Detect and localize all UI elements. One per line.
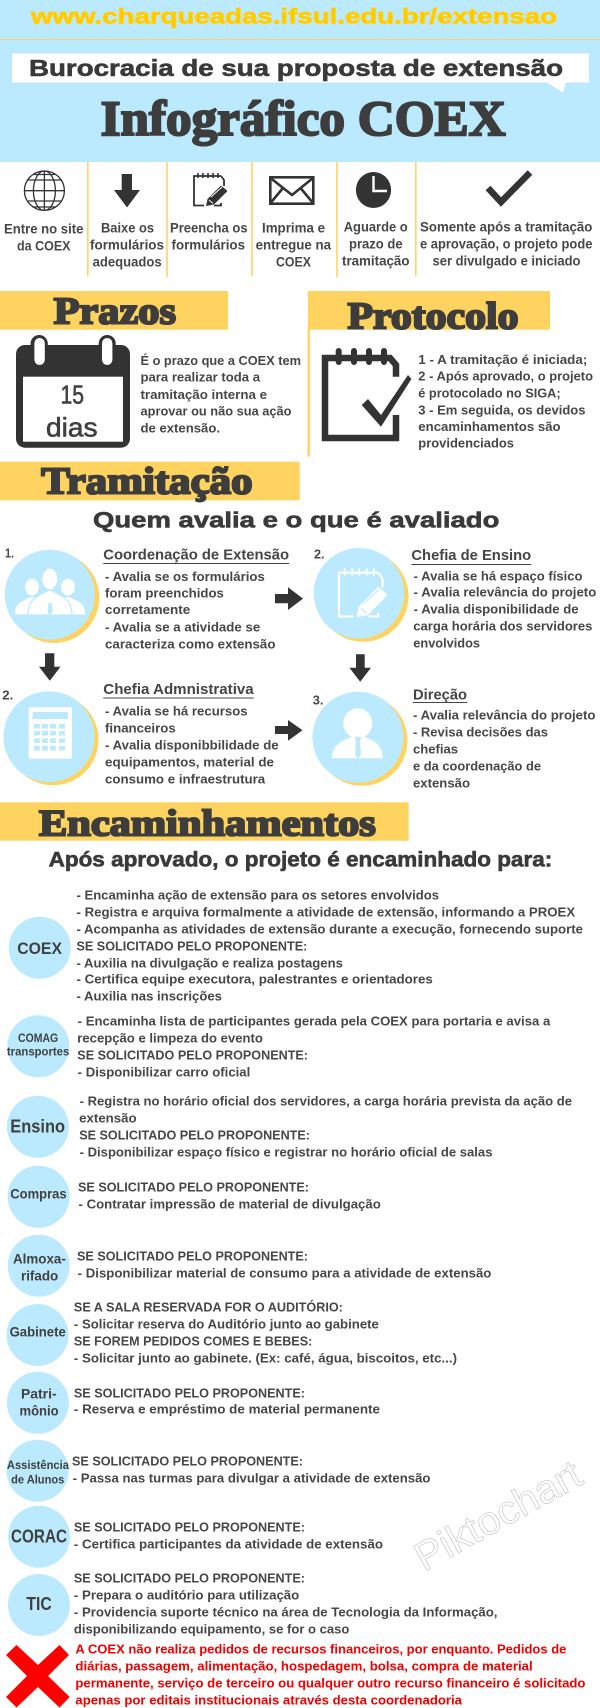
icon: envelope <box>270 177 313 204</box>
text: COEX duties: - Registra e arquiva formalmente a atividade de extensão, informando a PROEX <box>76 904 576 919</box>
icon: checklist <box>325 351 411 438</box>
text: Gabinete duties: - Solicitar reserva do Auditório junto ao gabinete <box>74 1317 379 1332</box>
step: imprima e entregue: Imprima e <box>262 220 325 236</box>
icon: notepad and pencil <box>194 173 228 206</box>
text: Patrimônio duties: SE SOLICITADO PELO PROPONENTE: <box>74 1385 305 1400</box>
badge: COMAG transportes <box>7 1015 70 1077</box>
row: Ensino <box>7 1094 572 1160</box>
text: protocolo steps: 3 - Em seguida, os devidos <box>418 402 586 417</box>
step: aguarde o prazo <box>342 219 410 269</box>
text: administrativa criteria: consumo e infraestrutura <box>105 772 266 787</box>
panel: prazos <box>0 290 301 448</box>
text: ensino criteria: - Avalia relevância do projeto <box>414 585 596 600</box>
text: Ensino duties: - Registra no horário oficial dos servidores, a carga horária prevista da ação de <box>80 1094 572 1109</box>
text: warning: apenas por editais institucionais através desta coordenadoria <box>75 1693 463 1708</box>
text: coordenação title: Coordenação de Extensão <box>103 546 289 563</box>
badge: Patrimônio: mônio <box>20 1403 59 1419</box>
icon: notepad circle <box>314 548 408 642</box>
text: prazo description: aprovar ou não sua ação <box>140 404 292 419</box>
text: warning: diárias, passagem, alimentação, hospedagem, bolsa, compra de material <box>75 1659 533 1674</box>
text: administrativa criteria: equipamentos, material de <box>105 755 274 770</box>
step: preencha os formulários: formulários <box>172 237 245 253</box>
text: COEX duties: - Auxilia nas inscrições <box>76 988 222 1003</box>
heading: prazos: Prazos <box>54 290 176 332</box>
row: CORAC <box>8 1506 383 1568</box>
badge: COEX <box>9 917 71 979</box>
text: protocolo steps: encaminhamentos são <box>418 419 561 434</box>
badge: Assistência de Alunos: Assistência <box>7 1458 69 1472</box>
text: protocolo steps <box>418 352 593 451</box>
text: Gabinete duties <box>74 1300 457 1366</box>
badge: Ensino <box>7 1096 69 1158</box>
badge: TIC <box>8 1574 70 1636</box>
row: Patrimônio <box>7 1372 380 1434</box>
watermark: Piktochart: Piktochart <box>407 1452 589 1580</box>
text: protocolo steps: é protocolado no SIGA; <box>418 386 561 401</box>
text: coordenação criteria <box>105 569 276 651</box>
badge: TIC: TIC <box>26 1594 52 1614</box>
text: ensino title: Chefia de Ensino <box>411 547 531 564</box>
text: COEX duties: SE SOLICITADO PELO PROPONENTE: <box>76 938 307 953</box>
icon: people circle <box>5 550 99 643</box>
text: ensino criteria: - Avalia se há espaço físico <box>414 568 583 583</box>
text: ensino criteria: carga horária dos servidores <box>413 618 592 633</box>
panel: direção <box>312 686 596 790</box>
text: CORAC duties <box>74 1520 383 1552</box>
text: prazo description: de extensão. <box>140 421 220 436</box>
text: Ensino duties: extensão <box>79 1111 137 1126</box>
text: coordenação criteria: - Avalia se os formulários <box>105 569 265 584</box>
heading: encaminhamentos <box>0 802 409 845</box>
step: somente após: ser divulgado e iniciado <box>432 253 580 269</box>
text: direção title: Direção <box>413 686 467 703</box>
text: coordenação criteria: foram preenchidos <box>105 585 224 600</box>
text: Compras duties <box>78 1180 381 1212</box>
text: direção criteria: - Revisa decisões das <box>413 724 548 739</box>
text: warning: A COEX não realiza pedidos de recursos financeiros, por enquanto. Pedidos de <box>75 1642 566 1657</box>
badge: Gabinete <box>6 1304 68 1366</box>
badge: CORAC <box>8 1506 70 1568</box>
text: prazo description <box>140 353 301 436</box>
badge: Assistência de Alunos <box>7 1440 69 1502</box>
heading: prazos <box>0 290 228 332</box>
text: Assistência duties: SE SOLICITADO PELO PROPONENTE: <box>72 1454 303 1469</box>
text: ensino criteria: - Avalia disponibilidade de <box>414 601 579 616</box>
text: Patrimônio duties <box>74 1385 380 1416</box>
panel: chefia administrativa: 2. <box>2 687 13 702</box>
step: baixe os formulários <box>90 220 164 270</box>
arrow: to chefia de ensino <box>275 587 303 610</box>
text: Almoxarifado duties: SE SOLICITADO PELO PROPONENTE: <box>77 1249 308 1264</box>
step: preencha os formulários: Preencha os <box>170 220 248 236</box>
step: somente após: Somente após a tramitação <box>420 219 592 235</box>
text: COMAG duties: recepção e limpeza do evento <box>77 1031 263 1046</box>
step: aguarde o prazo: Aguarde o <box>344 219 408 235</box>
badge: Patrimônio: Patri- <box>21 1385 57 1401</box>
icon: calendar 15 dias <box>16 335 130 448</box>
text: direção criteria <box>413 707 596 790</box>
subheading: após aprovado: Após aprovado, o projeto é encaminhado para: <box>49 849 552 872</box>
row: Compras <box>8 1166 381 1228</box>
text: CORAC duties: SE SOLICITADO PELO PROPONENTE: <box>74 1520 305 1535</box>
text: Almoxarifado duties <box>77 1249 491 1281</box>
icon: download arrow <box>114 174 140 208</box>
panel: coordenação de extensão: 1. <box>5 546 14 561</box>
panel: header <box>0 0 600 162</box>
badge: Compras <box>8 1166 70 1228</box>
text: Gabinete duties: SE A SALA RESERVADA FOR O AUDITÓRIO: <box>74 1300 343 1315</box>
text: administrativa criteria: financeiros <box>105 721 176 736</box>
text: COMAG duties: - Encaminha lista de participantes gerada pela COEX para portaria e avisa a <box>78 1014 551 1029</box>
row: TIC <box>8 1571 498 1637</box>
badge: Gabinete: Gabinete <box>10 1324 66 1340</box>
icon: calculator circle <box>4 691 98 785</box>
panel: coordenação de extensão <box>5 546 289 651</box>
text: protocolo steps: 1 - A tramitação é iniciada; <box>418 352 587 367</box>
text: administrativa title: Chefia Admnistrativa <box>103 681 254 698</box>
arrow: down to chefia administrativa <box>39 653 60 681</box>
text: prazo description: para realizar toda a <box>140 370 261 385</box>
speech banner <box>12 54 589 92</box>
panel: chefia de ensino <box>314 546 596 650</box>
text: Compras duties: - Contratar impressão de material de divulgação <box>78 1197 381 1212</box>
text: Almoxarifado duties: - Disponibilizar material de consumo para a atividade de extensão <box>78 1266 491 1281</box>
badge: Almoxarifado <box>8 1235 70 1297</box>
icon: red X <box>6 1645 70 1708</box>
heading: protocolo: Protocolo <box>348 295 518 337</box>
text: TIC duties: - Providencia suporte técnico na área de Tecnologia da Informação, <box>74 1605 498 1620</box>
step: imprima e entregue: COEX <box>276 254 312 270</box>
text: Assistência duties <box>72 1454 431 1486</box>
badge: Almoxarifado: Almoxa- <box>13 1251 66 1267</box>
text: COMAG duties <box>77 1014 551 1079</box>
step: baixe os formulários: Baixe os <box>101 220 154 236</box>
step: preencha os formulários <box>170 220 248 253</box>
text: administrativa criteria: - Avalia se há recursos <box>105 704 248 719</box>
text: COEX duties: - Acompanha as atividades de extensão durante a execução, fornecendo suporte <box>76 921 583 936</box>
text: Gabinete duties: SE FOREM PEDIDOS COMES E BEBES: <box>74 1334 312 1349</box>
text: direção criteria: extensão <box>413 775 470 790</box>
badge: CORAC: CORAC <box>11 1526 67 1546</box>
badge: Assistência de Alunos: de Alunos <box>11 1473 65 1487</box>
row: COMAG transportes <box>7 1014 551 1079</box>
text: protocolo steps: 2 - Após aprovado, o projeto <box>418 369 593 384</box>
text: Gabinete duties: - Solicitar junto ao gabinete. (Ex: café, água, biscoitos, etc...) <box>74 1351 457 1366</box>
text: COEX duties <box>76 887 583 1003</box>
step: imprima e entregue <box>256 220 331 270</box>
heading: protocolo <box>308 291 550 457</box>
text: Patrimônio duties: - Reserva e empréstimo de material permanente <box>74 1401 380 1416</box>
step: aguarde o prazo: tramitação <box>342 253 410 269</box>
heading: tramitação <box>0 460 300 502</box>
icon: globe <box>24 171 64 210</box>
badge: Ensino: Ensino <box>10 1117 65 1137</box>
text: TIC duties: disponibilizando equipamento, se for o caso <box>74 1622 349 1637</box>
step: entre no site: Entre no site <box>4 220 84 236</box>
text: coordenação criteria: caracteriza como extensão <box>105 636 276 651</box>
text: TIC duties: SE SOLICITADO PELO PROPONENTE: <box>74 1571 305 1586</box>
arrow: down to direção <box>349 654 371 682</box>
step: somente após <box>420 219 593 269</box>
text: direção criteria: chefias <box>413 741 458 756</box>
badge: Compras: Compras <box>10 1185 67 1201</box>
text: COEX duties: - Certifica equipe executora, palestrantes e orientadores <box>76 971 433 986</box>
step: baixe os formulários: formulários <box>90 237 164 253</box>
text: warning <box>75 1642 586 1708</box>
text: prazo description: É o prazo que a COEX tem <box>140 353 301 368</box>
title: Infográfico COEX <box>101 90 506 146</box>
row: COEX <box>9 887 583 1003</box>
text: TIC duties <box>74 1571 498 1637</box>
text: COEX duties: - Encaminha ação de extensão para os setores envolvidos <box>76 887 439 902</box>
text: administrativa criteria <box>105 704 279 787</box>
text: TIC duties: - Prepara o auditório para utilização <box>74 1588 299 1603</box>
text: Ensino duties <box>79 1094 572 1160</box>
badge: COEX: COEX <box>17 939 63 958</box>
text: warning: permanente, serviço de terceiro ou qualquer outro recurso financeiro é solicitado <box>75 1676 586 1691</box>
badge: Patrimônio <box>7 1372 69 1434</box>
text: administrativa criteria: - Avalia disponibbilidade de <box>105 738 279 753</box>
icon: calendar 15 dias: dias <box>46 413 98 443</box>
panel: direção: 3. <box>313 692 323 707</box>
text: Ensino duties: SE SOLICITADO PELO PROPONENTE: <box>79 1128 310 1143</box>
text: ensino criteria: envolvidos <box>413 635 480 650</box>
subheading: quem avalia: Quem avalia e o que é avaliado <box>93 508 499 533</box>
panel: protocolo <box>308 291 593 457</box>
row: Gabinete <box>6 1300 457 1366</box>
step: baixe os formulários: adequados <box>93 254 162 270</box>
website url: www.charqueadas.ifsul.edu.br/extensao <box>30 6 557 28</box>
panel: six steps <box>4 162 593 277</box>
text: direção criteria: - Avalia relevância do projeto <box>413 707 596 722</box>
text: Compras duties: SE SOLICITADO PELO PROPONENTE: <box>78 1180 309 1195</box>
panel: chefia administrativa <box>2 681 279 787</box>
arrow: to direção <box>275 720 302 741</box>
text: COMAG duties: - Disponibilizar carro oficial <box>78 1064 250 1079</box>
text: COEX duties: - Auxilia na divulgação e realiza postagens <box>76 955 343 970</box>
speech banner: Burocracia de sua proposta de extensão <box>29 55 563 81</box>
badge: COMAG transportes: COMAG <box>18 1031 58 1045</box>
text: prazo description: tramitação interna e <box>140 387 267 402</box>
text: coordenação criteria: - Avalia se a atividade se <box>105 619 260 634</box>
step: aguarde o prazo: prazo de <box>349 236 403 252</box>
panel: chefia de ensino: 2. <box>314 546 324 561</box>
text: ensino criteria <box>413 568 596 650</box>
step: entre no site <box>4 220 84 254</box>
text: COMAG duties: SE SOLICITADO PELO PROPONENTE: <box>77 1047 308 1062</box>
badge: COMAG transportes: transportes <box>7 1045 70 1059</box>
text: coordenação criteria: corretamente <box>105 602 190 617</box>
text: Assistência duties: - Passa nas turmas para divulgar a atividade de extensão <box>73 1471 431 1486</box>
icon: person circle <box>312 692 408 786</box>
text: direção criteria: e da coordenação de <box>413 758 541 773</box>
heading: tramitação: Tramitação <box>41 460 253 502</box>
text: Ensino duties: - Disponibilizar espaço físico e registrar no horário oficial de salas <box>80 1145 493 1160</box>
row: Assistência de Alunos <box>7 1440 431 1502</box>
heading: encaminhamentos: Encaminhamentos <box>39 804 376 845</box>
text: protocolo steps: providenciados <box>418 436 514 451</box>
icon: clock <box>356 172 391 208</box>
icon: check mark <box>488 172 530 202</box>
icon: calendar 15 dias: 15 <box>60 379 84 409</box>
step: imprima e entregue: entregue na <box>256 237 331 253</box>
text: CORAC duties: - Certifica participantes da atividade de extensão <box>74 1537 383 1552</box>
badge: Almoxarifado: rifado <box>21 1267 58 1283</box>
row: Almoxarifado <box>8 1235 491 1297</box>
step: entre no site: da COEX <box>17 238 71 254</box>
